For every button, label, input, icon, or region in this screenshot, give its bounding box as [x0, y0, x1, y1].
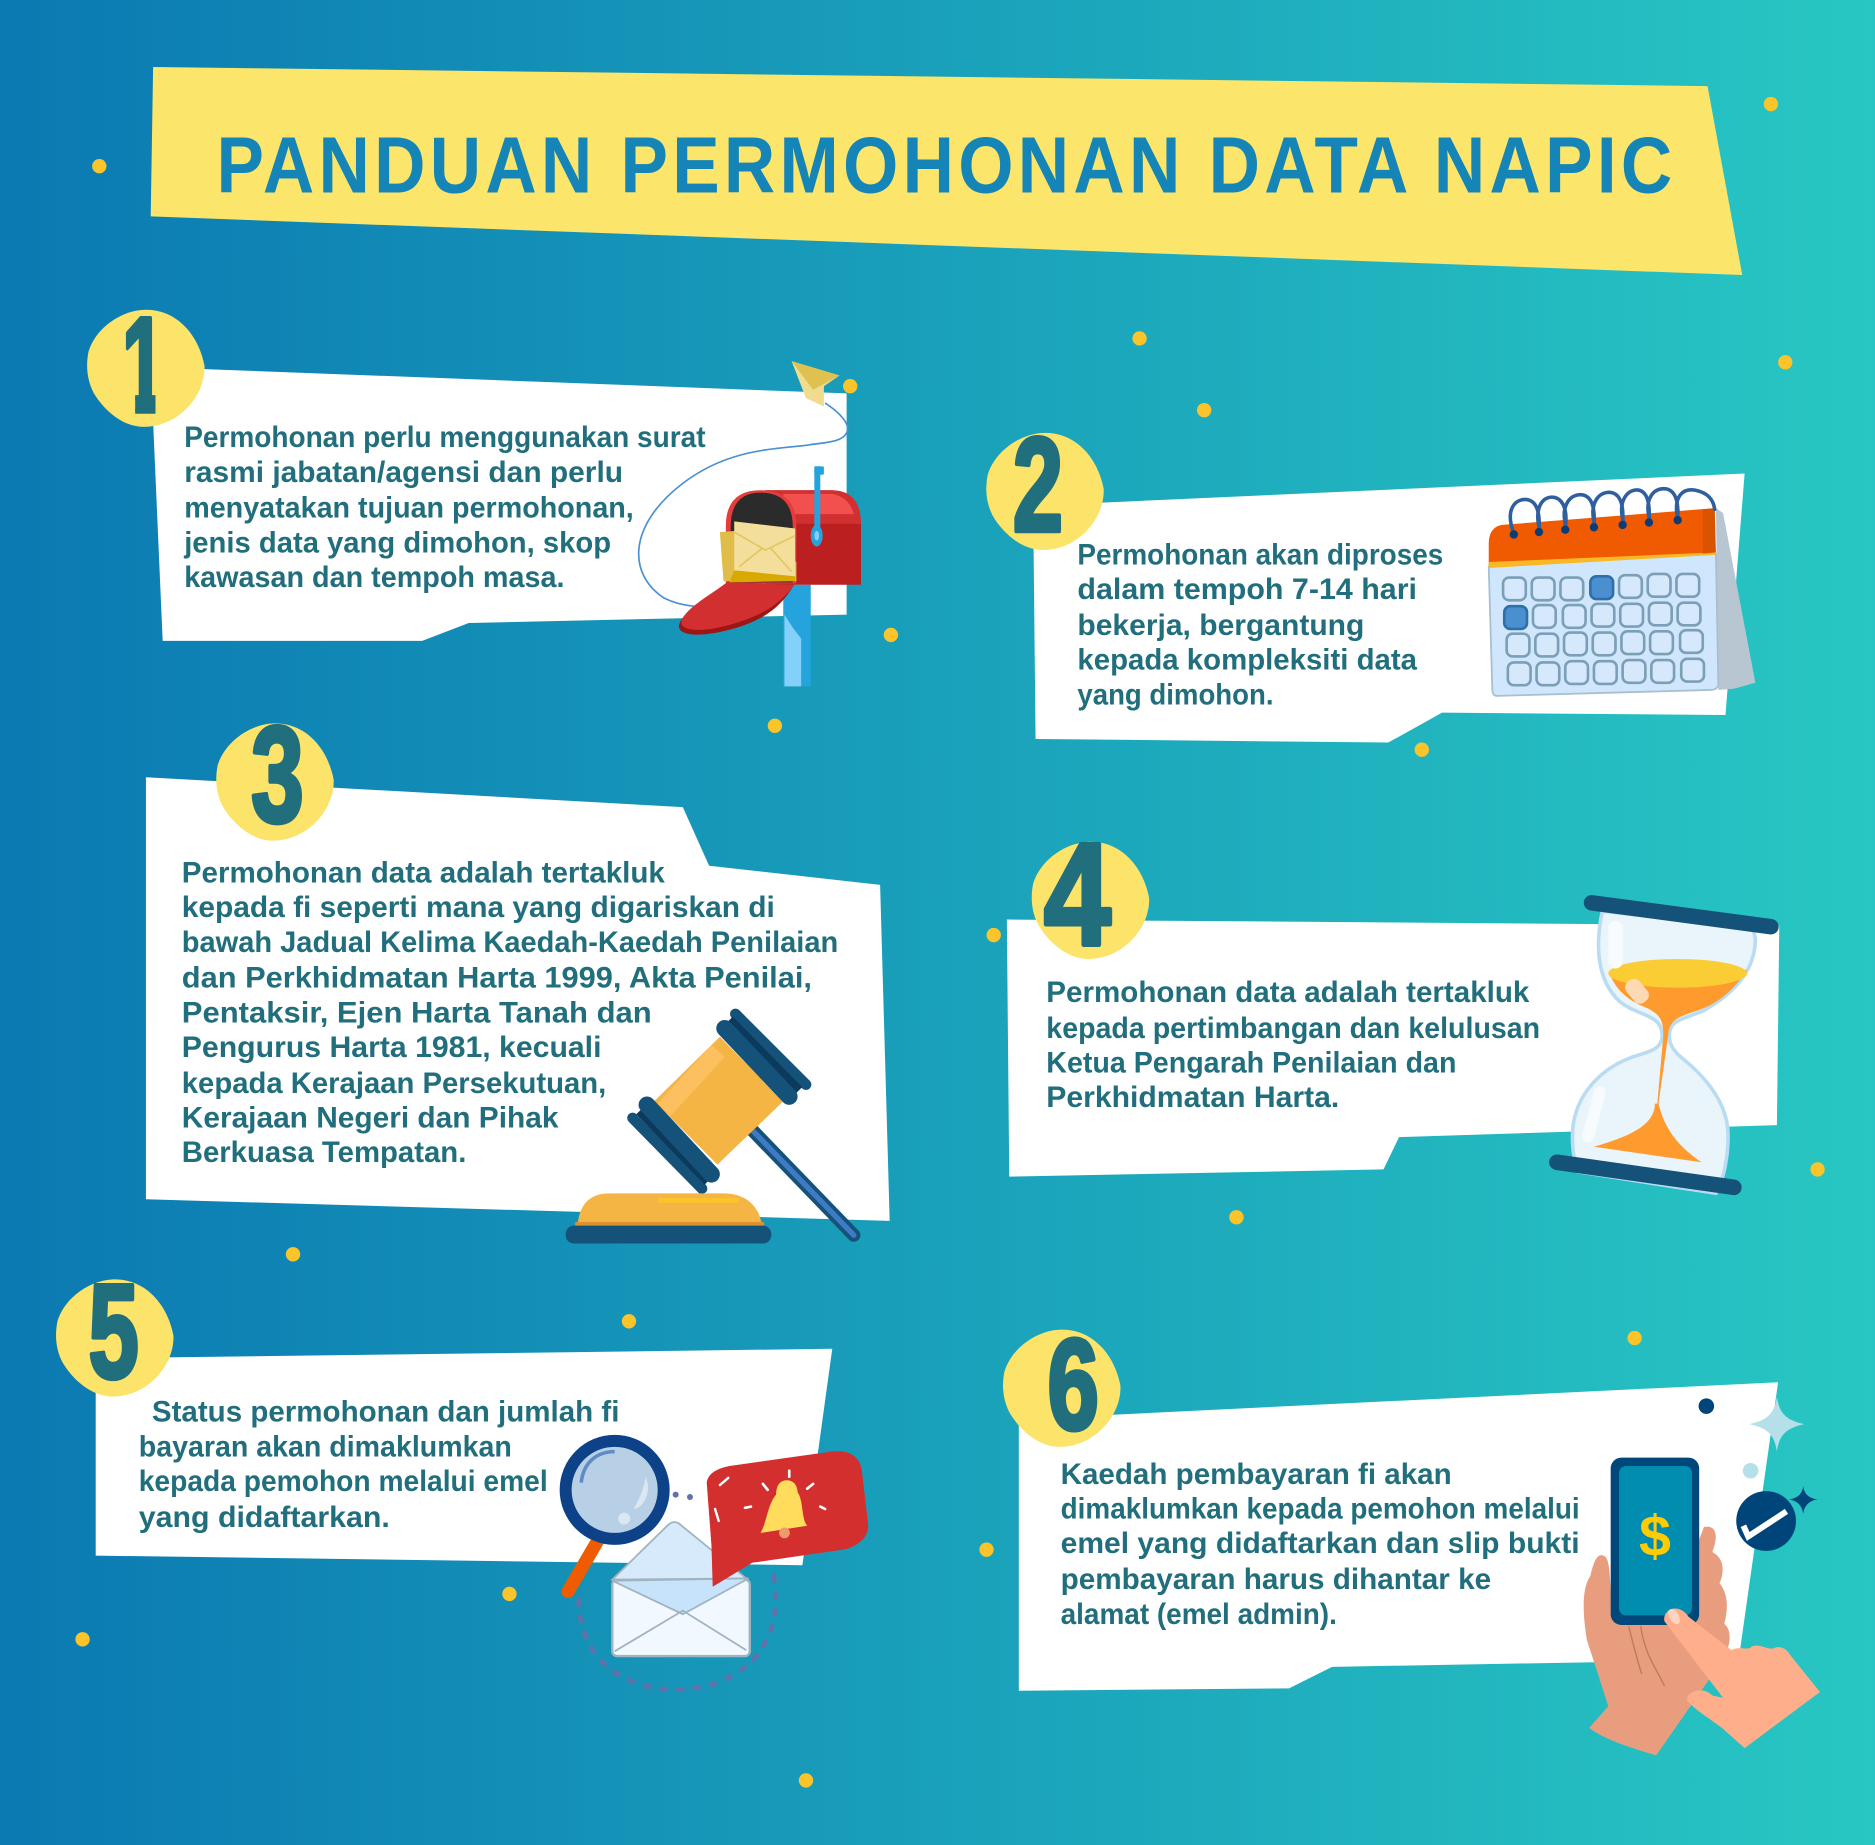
text: step 6: Kaedah pembayaran fi akan: [1061, 1459, 1452, 1491]
text: step 4: [1046, 977, 1540, 1114]
text: step 3: dan Perkhidmatan Harta 1999, Akta Penilai,: [182, 963, 812, 995]
text: step 3: Pentaksir, Ejen Harta Tanah dan: [182, 997, 652, 1029]
badge: number 5: [56, 1257, 173, 1406]
text: step 5: yang didaftarkan.: [139, 1502, 390, 1534]
panel: step 1: [151, 367, 847, 641]
text: step 1: rasmi jabatan/agensi dan perlu: [184, 457, 623, 489]
text: step 3: Pengurus Harta 1981, kecuali: [182, 1032, 602, 1064]
text: step 3: Berkuasa Tempatan.: [182, 1137, 466, 1169]
panel: step 6: [1019, 1382, 1778, 1691]
text: step 4: Permohonan data adalah tertakluk: [1046, 977, 1530, 1009]
text: step 6: alamat (emel admin).: [1061, 1599, 1337, 1631]
icon: hourglass: [1557, 903, 1771, 1193]
badge: number 2: 2: [1013, 411, 1063, 560]
badge: number 6: [1003, 1313, 1120, 1457]
text: step 3: kepada Kerajaan Persekutuan,: [182, 1068, 606, 1100]
text: step 5: [139, 1397, 619, 1534]
panel: step 3: [146, 777, 890, 1221]
text: step 1: menyatakan tujuan permohonan,: [184, 493, 634, 525]
text: step 2: kepada kompleksiti data: [1077, 645, 1418, 677]
icon: hand holding phone with payment: $: [1639, 1505, 1671, 1569]
badge: number 3: [216, 698, 334, 850]
text: step 4: kepada pertimbangan dan kelulusan: [1046, 1013, 1540, 1045]
panel: step 5: [96, 1349, 832, 1565]
text: step 6: pembayaran harus dihantar ke: [1061, 1564, 1491, 1596]
text: step 2: yang dimohon.: [1077, 679, 1273, 711]
icon: gavel: [566, 1014, 854, 1244]
text: step 1: jenis data yang dimohon, skop: [183, 527, 611, 559]
text: step 2: bekerja, bergantung: [1077, 610, 1364, 642]
badge: number 6: 6: [1048, 1313, 1099, 1457]
text: step 1: kawasan dan tempoh masa.: [184, 562, 564, 594]
text: step 2: [1077, 539, 1443, 711]
text: step 5: Status permohonan dan jumlah fi: [152, 1397, 619, 1429]
title banner: [151, 67, 1742, 275]
badge: number 1: 1: [122, 289, 165, 440]
title: PANDUAN PERMOHONAN DATA NAPIC: [216, 120, 1676, 210]
panel: step 4: [1007, 920, 1779, 1177]
text: step 5: kepada pemohon melalui emel: [139, 1466, 548, 1498]
text: step 1: [183, 422, 706, 594]
badge: number 3: 3: [251, 698, 304, 850]
text: step 3: Permohonan data adalah tertakluk: [182, 857, 666, 889]
text: step 3: bawah Jadual Kelima Kaedah-Kaedah Penilaian: [182, 927, 838, 959]
text: step 2: Permohonan akan diproses: [1077, 539, 1443, 571]
badge: number 1: [87, 310, 205, 427]
text: step 3: kepada fi seperti mana yang digariskan di: [182, 892, 775, 924]
icon: hand holding phone with payment: [1584, 1397, 1820, 1755]
text: step 2: dalam tempoh 7-14 hari: [1077, 574, 1417, 606]
text: step 1: Permohonan perlu menggunakan surat: [184, 422, 706, 454]
icon: calendar: [1489, 489, 1755, 696]
icon: mailbox with paper plane: [639, 361, 861, 686]
icon: magnifier, envelope and notification bell: [560, 1435, 868, 1690]
text: step 4: Perkhidmatan Harta.: [1046, 1082, 1339, 1114]
panel: step 2: [1033, 474, 1745, 743]
text: step 6: [1061, 1459, 1580, 1631]
text: step 6: dimaklumkan kepada pemohon melalui: [1061, 1494, 1580, 1526]
text: step 5: bayaran akan dimaklumkan: [139, 1431, 512, 1463]
badge: number 4: 4: [1044, 813, 1111, 976]
badge: number 2: [986, 411, 1104, 560]
badge: number 4: [1032, 813, 1149, 976]
text: step 3: [182, 857, 838, 1169]
text: step 6: emel yang didaftarkan dan slip bukti: [1061, 1528, 1580, 1560]
badge: number 5: 5: [89, 1257, 139, 1406]
text: step 4: Ketua Pengarah Penilaian dan: [1046, 1048, 1456, 1080]
text: step 3: Kerajaan Negeri dan Pihak: [182, 1103, 559, 1135]
